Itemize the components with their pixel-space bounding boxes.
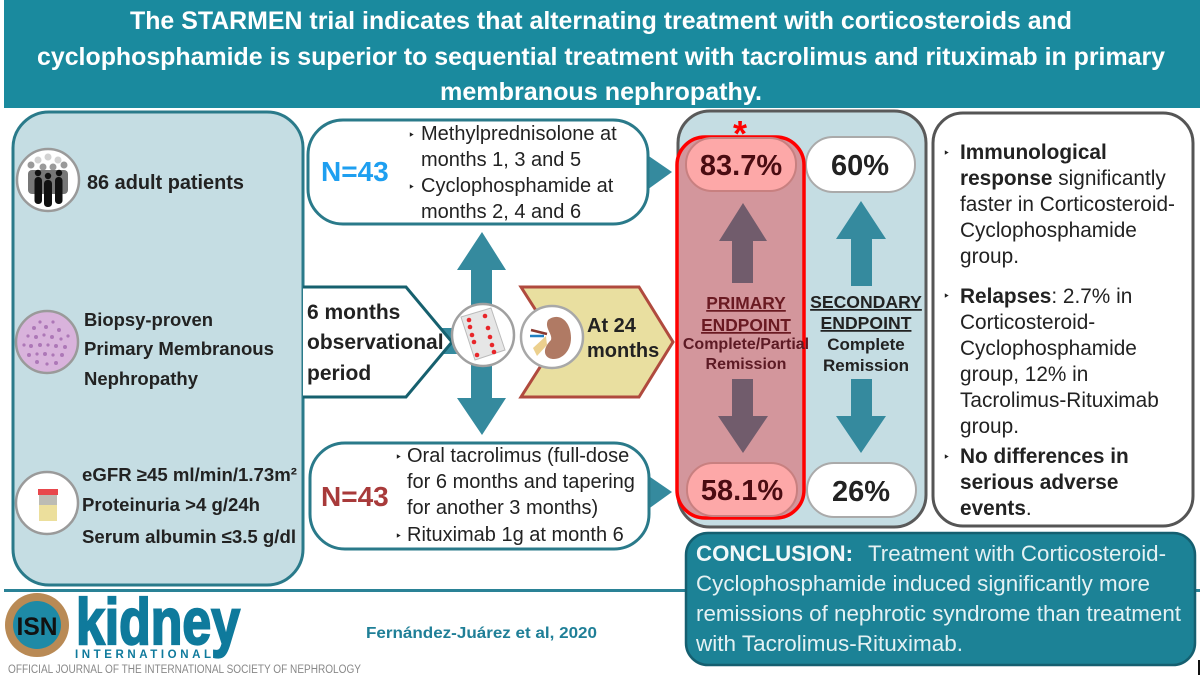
arrow: primary down <box>718 379 768 453</box>
arrow box: at 24 months: At 24 <box>587 315 637 337</box>
icon: kidney <box>521 306 583 368</box>
text: secondary endpoint: Remission <box>823 356 909 375</box>
icon: urine sample cup <box>16 472 78 534</box>
text: primary endpoint: Remission <box>706 356 786 373</box>
primary endpoint result 83.7% <box>686 138 796 191</box>
panel: key findings: group. <box>960 245 1019 268</box>
panel: key findings: events. <box>960 497 1032 520</box>
panel: key findings: Cyclophosphamide <box>960 219 1137 242</box>
text: secondary endpoint: SECONDARY <box>810 292 922 312</box>
text: biopsy-proven primary membranous nephropathy: Primary Membranous <box>84 338 274 359</box>
arrow box: 6 months observational period <box>303 287 452 397</box>
arrow: secondary up <box>836 201 886 286</box>
text: secondary endpoint <box>810 292 922 375</box>
panel: treatment arm N=43 tacrolimus: N=43 <box>321 481 389 512</box>
text: primary endpoint: ENDPOINT <box>701 315 791 335</box>
icon: pill blister <box>452 304 514 366</box>
panel: key findings <box>933 113 1193 526</box>
text: inclusion criteria <box>82 464 297 547</box>
panel: conclusion <box>686 533 1195 665</box>
panel: treatment arm N=43 corticosteroid: months 1, 3 and 5 <box>421 149 581 171</box>
panel: key findings: serious adverse <box>960 471 1118 494</box>
text: 86 adult patients: 86 adult patients <box>87 172 244 194</box>
logo: kidney international: kidney <box>76 585 240 658</box>
title banner <box>4 0 1200 108</box>
text: primary endpoint: Complete/Partial <box>683 336 809 353</box>
significance asterisk: * <box>733 113 747 154</box>
panel: treatment arm N=43 corticosteroid: N=43 <box>321 156 389 187</box>
panel: conclusion: Treatment with Corticosteroid- <box>868 541 1166 566</box>
panel: key findings: Immunological <box>960 141 1107 164</box>
arrow box: 6 months observational period: 6 months <box>307 301 400 324</box>
panel: key findings: ‣ <box>943 450 950 464</box>
secondary endpoint result 60% <box>806 137 915 192</box>
text: secondary endpoint: ENDPOINT <box>821 313 912 333</box>
title banner: cyclophosphamide is superior to sequential treatment with tacrolimus and rituximab in primary <box>37 44 1165 71</box>
panel: key findings: No differences in <box>960 445 1129 468</box>
text: inclusion criteria: Proteinuria >4 g/24h <box>82 494 260 515</box>
secondary endpoint result 26% <box>807 463 916 517</box>
panel: treatment arm N=43 tacrolimus <box>310 443 649 549</box>
text: biopsy-proven primary membranous nephropathy <box>84 309 274 389</box>
title banner: membranous nephropathy. <box>440 79 762 106</box>
panel: key findings: faster in Corticosteroid- <box>960 193 1175 216</box>
panel: key findings: group, 12% in <box>960 363 1088 386</box>
panel: key findings: ‣ <box>943 146 950 160</box>
arrow: treatment allocation double arrow <box>457 232 506 435</box>
panel: treatment arm N=43 corticosteroid <box>308 120 648 224</box>
footer rule <box>4 589 1200 592</box>
panel: conclusion: with Tacrolimus-Rituximab. <box>695 631 963 656</box>
arrow: secondary down <box>836 379 886 453</box>
panel: key findings: Cyclophosphamide <box>960 337 1137 360</box>
panel: key findings: Relapses: 2.7% in <box>960 285 1132 308</box>
panel: treatment arm N=43 tacrolimus: for 6 months and tapering <box>407 471 635 493</box>
arrow: stub towards pill icon <box>440 328 472 354</box>
arrow: to top endpoints <box>640 150 672 195</box>
primary endpoint result 58.1% <box>687 463 797 516</box>
panel: key findings: Corticosteroid- <box>960 311 1095 334</box>
arrow box: 6 months observational period: observational <box>307 331 444 354</box>
panel: key findings: group. <box>960 415 1019 438</box>
logo: ISN seal: ISN <box>16 613 58 641</box>
panel: treatment arm N=43 tacrolimus: Oral tacrolimus (full-dose <box>407 445 629 467</box>
panel: treatment arm N=43 tacrolimus: Rituximab 1g at month 6 <box>407 524 624 546</box>
panel: patient characteristics <box>13 112 303 585</box>
primary endpoint result 83.7%: 83.7% <box>700 150 782 182</box>
arrow box: 6 months observational period: period <box>307 362 371 385</box>
panel: primary endpoint highlight <box>677 137 809 518</box>
text: biopsy-proven primary membranous nephropathy: Nephropathy <box>84 368 199 389</box>
text: secondary endpoint: Complete <box>827 335 905 354</box>
panel: treatment arm N=43 corticosteroid: Methylprednisolone at <box>421 123 617 145</box>
panel: endpoints <box>678 111 926 527</box>
arrow box: at 24 months: months <box>587 340 659 362</box>
arrow: primary up <box>719 203 767 283</box>
panel: treatment arm N=43 tacrolimus: ‣ <box>395 450 402 464</box>
text: inclusion criteria: Serum albumin ≤3.5 g/dl <box>82 526 296 547</box>
arrow: to bottom endpoints <box>640 470 672 515</box>
panel: treatment arm N=43 corticosteroid: ‣ <box>408 128 415 142</box>
panel: conclusion: remissions of nephrotic syndrome than treatment <box>696 601 1182 626</box>
logo: kidney international: INTERNATIONAL <box>75 649 211 661</box>
text: biopsy-proven primary membranous nephropathy: Biopsy-proven <box>84 309 213 330</box>
text: citation: Fernández-Juárez et al, 2020 <box>366 625 597 642</box>
panel: treatment arm N=43 corticosteroid: months 2, 4 and 6 <box>421 201 581 223</box>
primary endpoint result 58.1%: 58.1% <box>701 475 783 507</box>
panel: treatment arm N=43 corticosteroid: ‣ <box>408 180 415 194</box>
panel: key findings: Tacrolimus-Rituximab <box>960 389 1159 412</box>
secondary endpoint result 26%: 26% <box>832 476 890 508</box>
panel: key findings: ‣ <box>943 289 950 303</box>
corner tick mark <box>1198 660 1200 675</box>
panel: conclusion: Cyclophosphamide induced significantly more <box>696 571 1150 596</box>
panel: treatment arm N=43 tacrolimus: for another 3 months) <box>407 497 598 519</box>
panel: treatment arm N=43 tacrolimus: ‣ <box>395 529 402 543</box>
panel: key findings: response significantly <box>960 167 1166 190</box>
icon: patients group <box>17 149 79 211</box>
secondary endpoint result 60%: 60% <box>831 150 889 182</box>
icon: biopsy histology <box>16 311 78 373</box>
text: inclusion criteria: eGFR ≥45 ml/min/1.73m² <box>82 464 297 485</box>
arrow box: at 24 months <box>521 287 673 397</box>
text: primary endpoint <box>683 293 809 373</box>
logo: ISN seal <box>5 593 69 657</box>
panel: conclusion: CONCLUSION: <box>696 541 853 566</box>
title banner: The STARMEN trial indicates that alternating treatment with corticosteroids and <box>130 8 1072 35</box>
text: primary endpoint: PRIMARY <box>706 293 786 313</box>
panel: treatment arm N=43 corticosteroid: Cyclophosphamide at <box>421 175 614 197</box>
